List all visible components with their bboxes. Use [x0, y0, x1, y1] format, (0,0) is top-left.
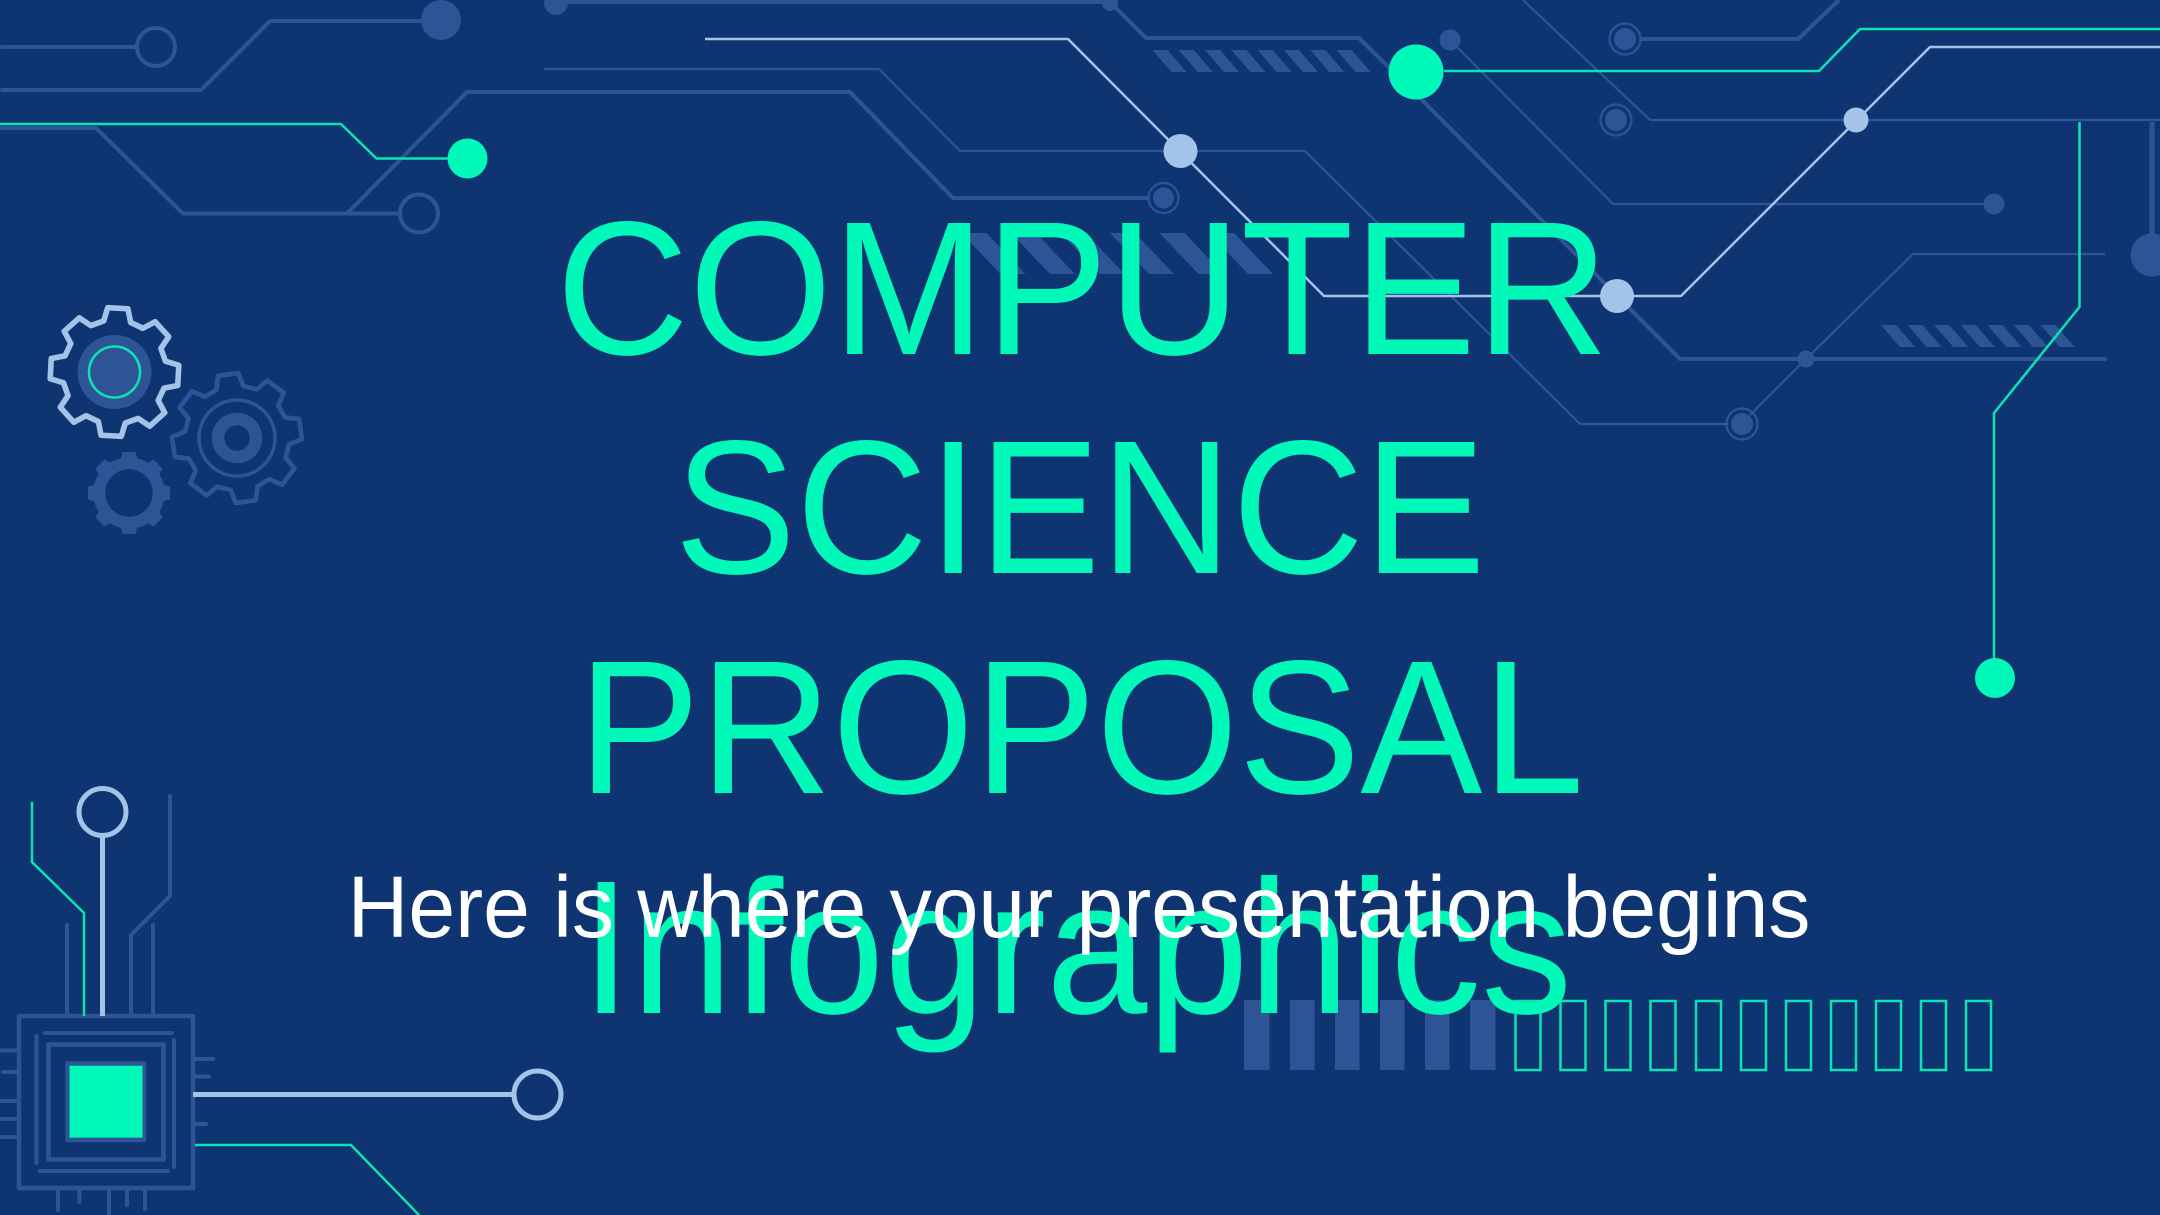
- circuit traces: top right: [1600, 0, 2160, 440]
- icon: light outlined gear: [47, 305, 182, 439]
- chip core: [70, 1066, 142, 1138]
- outlined bars: [1516, 1001, 1991, 1070]
- subtitle: Here is where your presentation begins: [348, 860, 1810, 956]
- chip green trace: up: [32, 802, 84, 1016]
- title: [556, 181, 1609, 1054]
- title: COMPUTER: [556, 181, 1609, 395]
- green circuit trace: top left: [0, 124, 488, 178]
- hatch stripes: behind title: [962, 233, 1273, 274]
- title: PROPOSAL: [578, 621, 1584, 834]
- hatch stripes: top centre: [1152, 50, 1371, 72]
- chip light lead: right: [193, 1071, 561, 1118]
- icon: dark outlined gear: [164, 365, 310, 511]
- title: SCIENCE: [674, 400, 1486, 614]
- hatch stripes: right: [1881, 325, 2075, 347]
- green circuit trace: right: [1975, 122, 2080, 698]
- title: Infographics: [581, 841, 1572, 1054]
- chip light lead: up: [79, 788, 126, 1016]
- green circuit trace: top right: [1388, 29, 2160, 100]
- icon: small solid gear: [88, 452, 170, 534]
- chip green trace: down: [195, 1145, 419, 1215]
- chip body: [19, 1016, 193, 1188]
- circuit traces: top left: [0, 0, 1148, 232]
- filled bars: [1244, 1000, 1496, 1070]
- chip traces: [0, 796, 213, 1215]
- icon: microchip: [0, 788, 561, 1215]
- light blue circuit trace with nodes: [705, 39, 2160, 313]
- circuit traces: top centre: [544, 0, 2160, 424]
